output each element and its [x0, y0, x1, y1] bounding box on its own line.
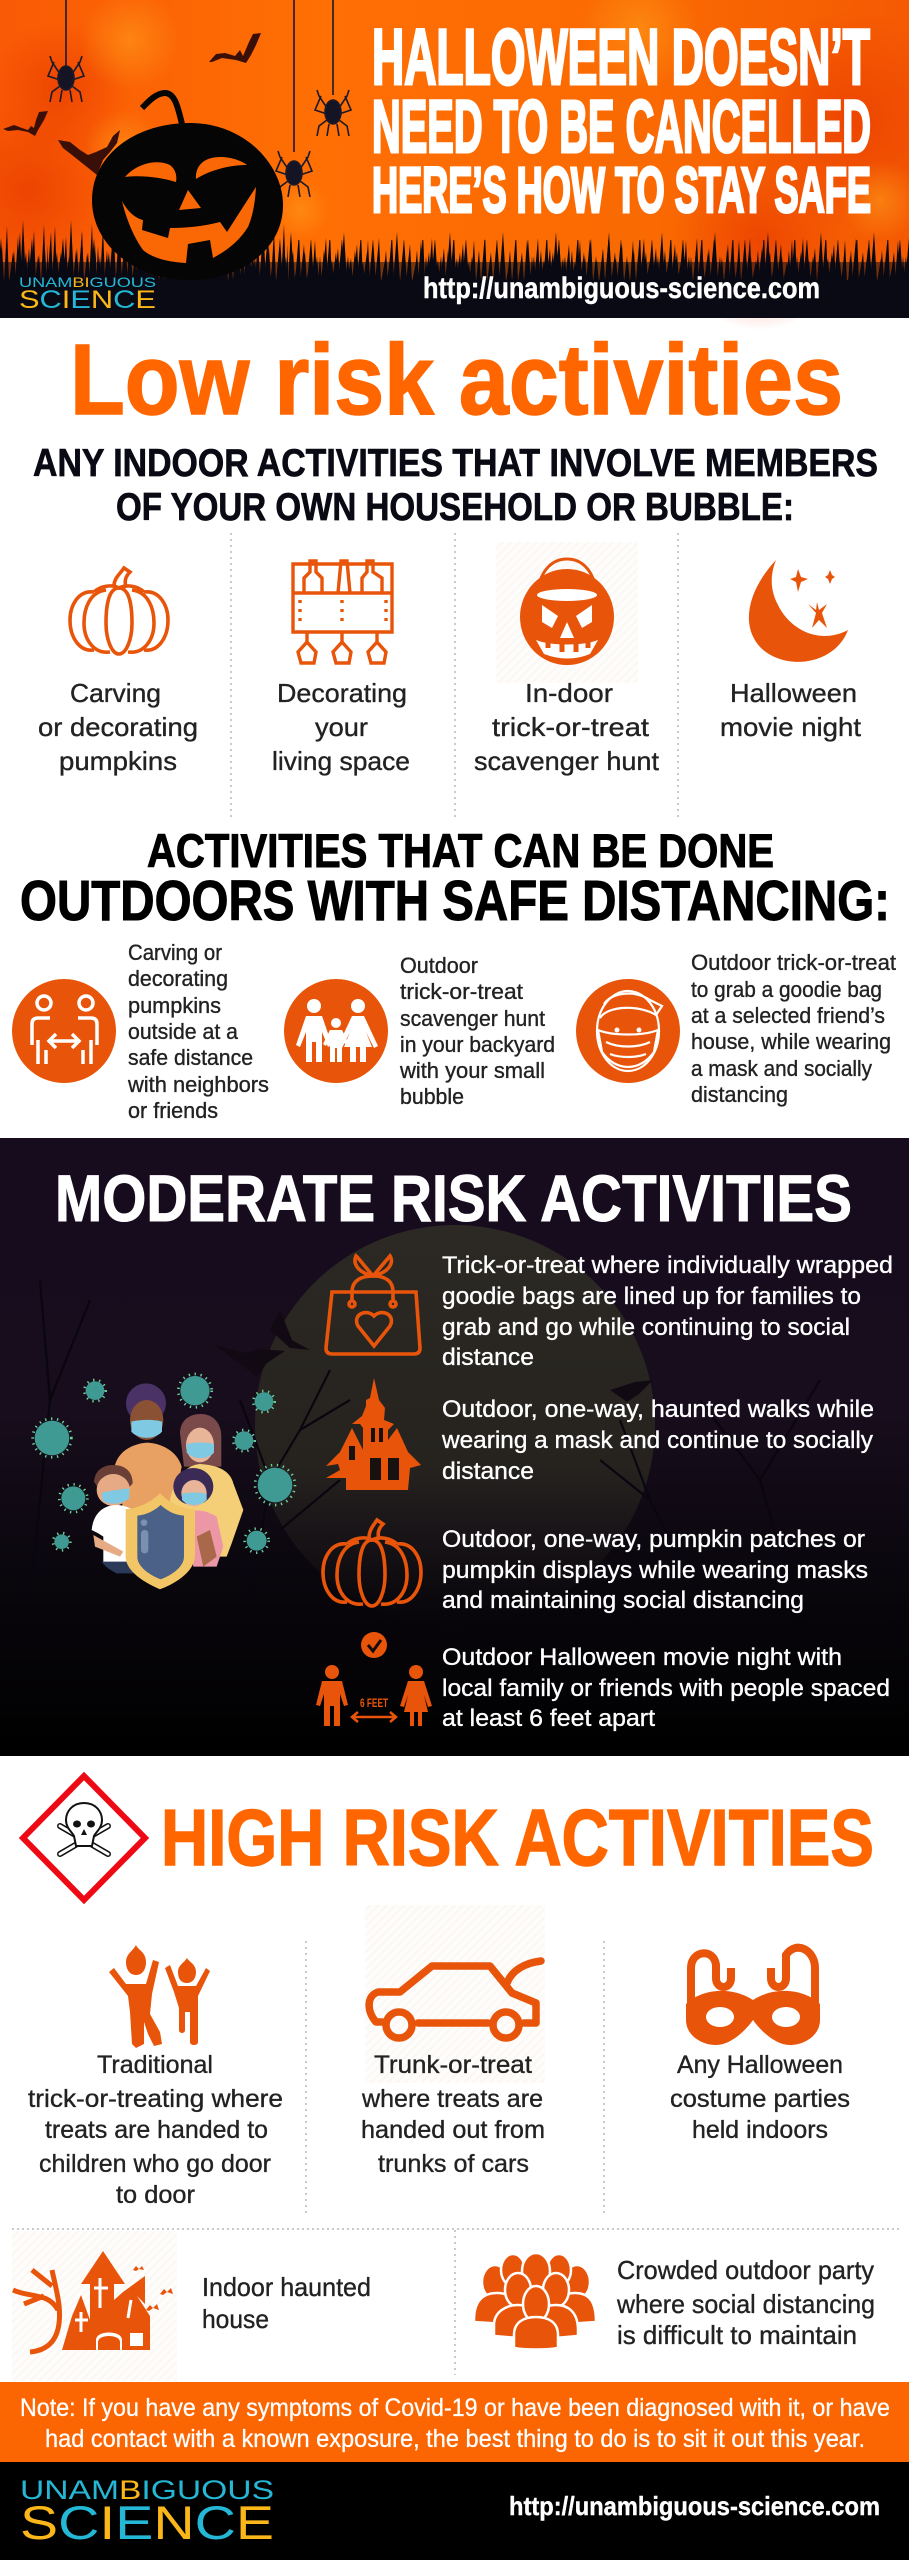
logo: unambiguous science: SCIENCE — [19, 286, 156, 314]
text: carving outside: pumpkins — [128, 993, 221, 1018]
text: costume parties: Any Halloween — [677, 2051, 843, 2079]
text: backyard hunt: scavenger hunt — [400, 1006, 545, 1031]
mother — [180, 1414, 221, 1467]
text: scavenger hunt: scavenger hunt — [474, 746, 660, 776]
daughter — [173, 1468, 213, 1505]
icon: haunted house — [12, 2231, 177, 2381]
text: outdoor movie night: at least 6 feet apart — [442, 1705, 655, 1732]
text: trunk-or-treat — [361, 2051, 545, 2178]
text: carving outside: Carving or — [128, 940, 222, 965]
text: carving outside: decorating — [128, 966, 228, 991]
icon: goodie bag — [326, 1256, 420, 1354]
text: pumpkin patches: Outdoor, one-way, pumpkin patches or — [442, 1526, 865, 1553]
icon: masked face — [576, 979, 680, 1083]
header title — [372, 12, 871, 226]
text: outdoor movie night: Outdoor Halloween movie night with — [442, 1644, 842, 1671]
icon: costume mask — [686, 1948, 820, 2045]
text: goodie bag: Outdoor trick-or-treat — [691, 950, 896, 975]
subheading: indoor activities: OF YOUR OWN HOUSEHOLD OR BUBBLE: — [116, 486, 794, 529]
note banner — [0, 2382, 909, 2462]
text: goodie bag: distancing — [691, 1082, 788, 1107]
text: trunk-or-treat: handed out from — [361, 2116, 545, 2144]
text: wrapped goodie bags: grab and go while continuing to social — [442, 1314, 850, 1341]
text: decorating: Decorating — [277, 678, 407, 708]
text: carving outside — [127, 940, 269, 1123]
icon: trick-or-treating kids — [109, 1945, 210, 2048]
logo: footer unambiguous science: UNAM BIGUOUS — [20, 2475, 274, 2505]
text: crowded party: Crowded outdoor party — [617, 2255, 874, 2285]
text: carving outside: outside at a — [128, 1019, 239, 1044]
icon: jack-o-lantern — [92, 93, 283, 280]
footer — [0, 2462, 909, 2560]
text: crowded party: is difficult to maintain — [617, 2320, 857, 2350]
icon: spiders — [48, 0, 351, 197]
text: carving outside: or friends — [128, 1098, 218, 1123]
text: scavenger hunt: In-door — [525, 678, 613, 708]
subheading: indoor activities — [33, 442, 878, 529]
text: backyard hunt: with your small — [399, 1058, 545, 1083]
text: scavenger hunt: trick-or-treat — [492, 712, 650, 742]
text: backyard hunt: trick-or-treat — [400, 979, 523, 1004]
text: trunk-or-treat: trunks of cars — [378, 2150, 529, 2178]
text: backyard hunt: bubble — [400, 1084, 464, 1109]
text: goodie bag — [691, 950, 896, 1107]
icon: decorated shelf — [293, 561, 392, 663]
text: wrapped goodie bags: goodie bags are lined up for families to — [442, 1283, 861, 1310]
header url: http://unambiguous-science.com — [423, 272, 820, 305]
text: traditional trick-or-treating — [28, 2051, 283, 2209]
father — [115, 1443, 182, 1510]
header banner — [0, 0, 909, 330]
text: costume parties: costume parties — [670, 2085, 850, 2113]
viruses — [33, 1374, 295, 1553]
text: movie night — [720, 678, 862, 742]
text: indoor haunted house: Indoor haunted — [202, 2272, 371, 2302]
text: trunk-or-treat: Trunk-or-treat — [374, 2051, 532, 2079]
icon: family — [284, 979, 388, 1083]
text: backyard hunt: in your backyard — [400, 1032, 555, 1057]
text: pumpkin patches: pumpkin displays while wearing masks — [442, 1557, 868, 1584]
text: goodie bag: to grab a goodie bag — [691, 977, 882, 1002]
panel: low risk indoor items — [38, 542, 862, 776]
text: wrapped goodie bags: distance — [442, 1344, 534, 1371]
text: haunted walks — [441, 1396, 874, 1485]
text: haunted walks: Outdoor, one-way, haunted walks while — [442, 1396, 874, 1423]
text: outdoor movie night — [442, 1644, 890, 1732]
icon: crowd — [474, 2253, 596, 2350]
text: backyard hunt — [399, 953, 555, 1109]
heading: low risk: Low risk activities — [70, 324, 843, 436]
icon: pumpkin — [70, 568, 168, 654]
logo: unambiguous science — [19, 274, 156, 314]
text: wrapped goodie bags: Trick-or-treat where individually wrapped — [442, 1252, 893, 1279]
text: decorating — [272, 678, 410, 776]
text: carving outside: safe distance — [128, 1045, 253, 1070]
text: carving: Carving — [70, 678, 161, 708]
text: trunk-or-treat: where treats are — [361, 2085, 543, 2113]
illustration: masked family with shield — [33, 1374, 295, 1589]
text: costume parties: held indoors — [692, 2116, 828, 2144]
text: pumpkin patches: and maintaining social distancing — [442, 1587, 804, 1614]
panel: high risk items — [12, 1905, 875, 2381]
text: traditional trick-or-treating: treats are handed to — [45, 2116, 268, 2144]
panel: outdoor items — [12, 940, 896, 1123]
son — [94, 1465, 133, 1488]
icon: toxic hazard diamond — [23, 1776, 145, 1900]
text: traditional trick-or-treating: trick-or-treating where — [28, 2085, 283, 2113]
text: carving outside: with neighbors — [127, 1072, 269, 1097]
text: movie night: Halloween — [730, 678, 857, 708]
text: outdoor movie night: local family or friends with people spaced — [442, 1675, 890, 1702]
text: indoor haunted house: house — [202, 2304, 269, 2334]
logo: footer unambiguous science — [20, 2475, 274, 2549]
logo: footer unambiguous science: SCIENCE — [20, 2496, 274, 2549]
text: decorating: your — [315, 712, 368, 742]
text: carving — [38, 678, 198, 776]
text: scavenger hunt — [474, 678, 660, 776]
text: carving: pumpkins — [59, 746, 177, 776]
text: indoor haunted house — [202, 2272, 371, 2334]
icon: distancing people — [12, 979, 116, 1083]
panel: moderate risk — [0, 1138, 909, 1756]
icon: six feet apart: 6 FEET — [360, 1696, 388, 1710]
logo: unambiguous science: UNAM BI GUOUS — [19, 274, 156, 290]
footer url: http://unambiguous-science.com — [509, 2491, 880, 2521]
text: crowded party — [616, 2255, 875, 2350]
text: decorating: living space — [272, 746, 410, 776]
icon: haunted castle — [326, 1378, 421, 1490]
text: traditional trick-or-treating: Traditional — [97, 2051, 213, 2079]
text: traditional trick-or-treating: to door — [116, 2181, 195, 2209]
text: wrapped goodie bags — [442, 1252, 893, 1371]
text: pumpkin patches — [442, 1526, 868, 1614]
text: crowded party: where social distancing — [616, 2289, 875, 2319]
text: haunted walks: distance — [442, 1458, 534, 1485]
icon: car with open trunk — [365, 1905, 545, 2083]
subheading: outdoors — [20, 824, 890, 933]
icon: pumpkin outline — [323, 1520, 421, 1606]
text: movie night: movie night — [720, 712, 862, 742]
text: goodie bag: a mask and socially — [691, 1056, 872, 1081]
text: carving: or decorating — [38, 712, 198, 742]
subheading: outdoors: ACTIVITIES THAT CAN BE DONE — [147, 824, 774, 877]
text: backyard hunt: Outdoor — [400, 953, 478, 978]
icon: moon and stars — [749, 560, 848, 662]
text: traditional trick-or-treating: children who go door — [39, 2150, 271, 2178]
text: goodie bag: house, while wearing — [691, 1029, 891, 1054]
icon: bats — [3, 33, 261, 175]
grass silhouette — [0, 212, 909, 318]
text: costume parties — [670, 2051, 850, 2144]
shield — [126, 1493, 195, 1589]
icon: six feet apart — [316, 1632, 432, 1726]
text: goodie bag: at a selected friend’s — [691, 1003, 885, 1028]
icon: trick-or-treat bucket — [496, 542, 638, 683]
note banner: had contact with a known exposure, the best thing to do is to sit it out this year. — [45, 2425, 865, 2453]
text: haunted walks: wearing a mask and continue to socially — [441, 1427, 873, 1454]
